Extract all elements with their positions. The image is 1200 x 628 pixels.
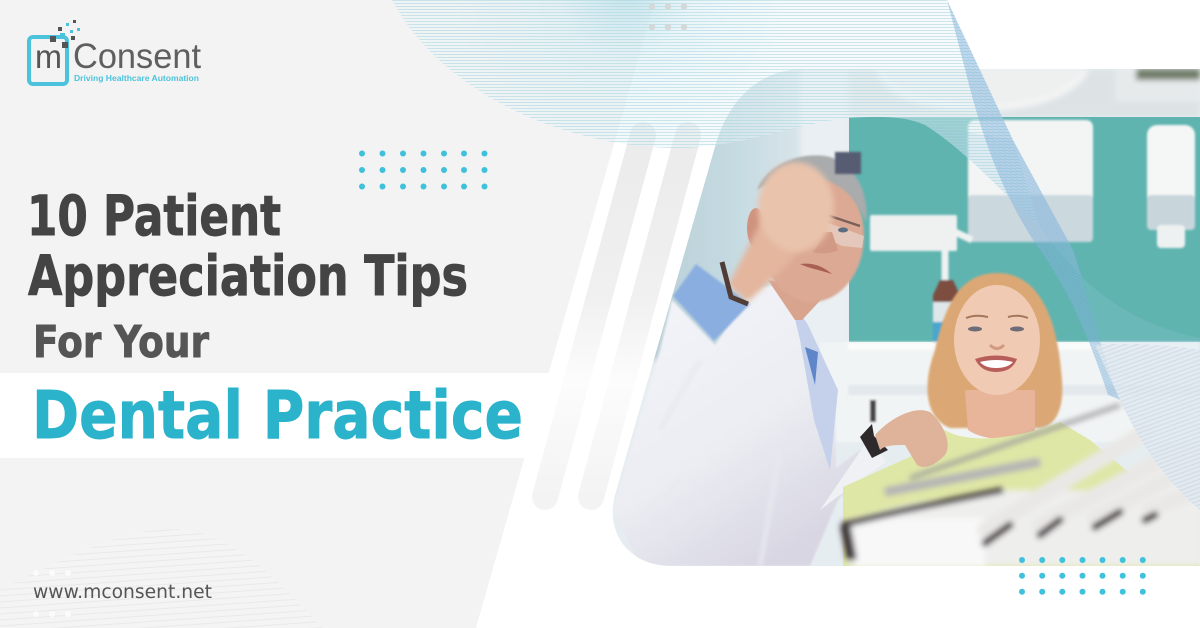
wrist strap: [722, 262, 748, 304]
coat fold shadows: [758, 522, 768, 564]
white title band: [0, 373, 552, 458]
patient: [843, 273, 1200, 566]
dark frame: [1136, 69, 1200, 80]
handpiece rods: [985, 432, 1200, 530]
white dots bottom left: [33, 570, 71, 617]
mouth: [800, 264, 832, 274]
dispenser window: [968, 195, 1093, 242]
gray angled panel: [0, 0, 655, 628]
doctor lower sleeve: [820, 440, 886, 510]
tray: [848, 440, 1200, 566]
highlighted title: Dental Practice: [32, 377, 523, 454]
soap nozzle: [1157, 225, 1185, 248]
bottle: [932, 278, 959, 303]
logo: [29, 20, 201, 84]
brow: [829, 215, 860, 227]
logo tablet m: m: [35, 38, 62, 75]
soap dispenser: [1146, 124, 1196, 198]
raised arm: [728, 222, 793, 304]
left wall: [654, 70, 800, 362]
logo pixels: [50, 20, 80, 48]
blue ribbon: [947, 0, 1120, 400]
title line two: Appreciation Tips: [28, 244, 468, 308]
dots above title: [359, 150, 488, 190]
counter: [836, 344, 1134, 441]
wave tint: [392, 0, 1040, 227]
rod shadows: [985, 512, 1155, 543]
shirt: [795, 318, 838, 470]
hose: [945, 232, 972, 280]
blue ribbon lines: [947, 0, 1120, 400]
hair: [757, 155, 867, 222]
towel dispenser: [966, 118, 1094, 198]
ear: [747, 208, 762, 246]
teal wall: [849, 117, 1200, 342]
hand on shoulder: [875, 410, 948, 467]
dark tray edge: [842, 490, 1003, 525]
x-ray film: [835, 152, 861, 174]
hose lines: [910, 405, 1120, 478]
face: [954, 285, 1040, 395]
white pillar: [800, 69, 848, 429]
cabinet: [1119, 72, 1197, 98]
logo tablet: [29, 37, 67, 84]
glasses: [825, 224, 864, 248]
bottom left wave: [0, 529, 322, 628]
dental lamp: [889, 69, 1081, 104]
neck: [965, 390, 1035, 439]
gray dots top: [649, 3, 687, 30]
blurred dental tools: [842, 405, 1200, 568]
bottle label: [932, 300, 953, 324]
website url: www.mconsent.net: [33, 582, 212, 603]
eye: [838, 228, 848, 232]
logo tagline: Driving Healthcare Automation: [74, 74, 199, 83]
title line one: 10 Patient: [27, 184, 281, 248]
neck: [768, 280, 821, 320]
lamp ring: [998, 102, 1039, 110]
ceiling fixtures: [848, 69, 1200, 117]
angled stripe one: [545, 135, 643, 497]
watch: [860, 424, 888, 458]
pale ribbon: [925, 125, 1200, 510]
smile: [975, 356, 1017, 372]
photo: dentist and patient: [600, 60, 1200, 570]
fist: [758, 162, 834, 252]
blue cuff: [673, 264, 750, 341]
doctor coat: [637, 285, 860, 566]
photo background: [600, 60, 1200, 570]
tie: [805, 347, 818, 385]
hair: [927, 273, 1062, 428]
gown: [843, 422, 1200, 566]
wave lines: [392, 0, 1040, 227]
lower right line swirl: [1095, 344, 1200, 510]
angled stripe two: [591, 135, 688, 497]
dots bottom right: [1019, 557, 1146, 595]
nose: [812, 232, 838, 253]
soap window: [1147, 195, 1195, 230]
nose: [990, 345, 1004, 348]
brows: [966, 316, 1028, 318]
doctor: [613, 152, 886, 566]
wall socket: [870, 215, 957, 251]
subtitle: For Your: [33, 317, 209, 368]
top fine-line wave: [392, 0, 1200, 510]
white block: [855, 518, 985, 568]
logo wordmark: Consent: [73, 37, 201, 76]
face: [771, 180, 866, 303]
gray tray halo: [885, 462, 1040, 492]
eyes: [968, 326, 982, 332]
